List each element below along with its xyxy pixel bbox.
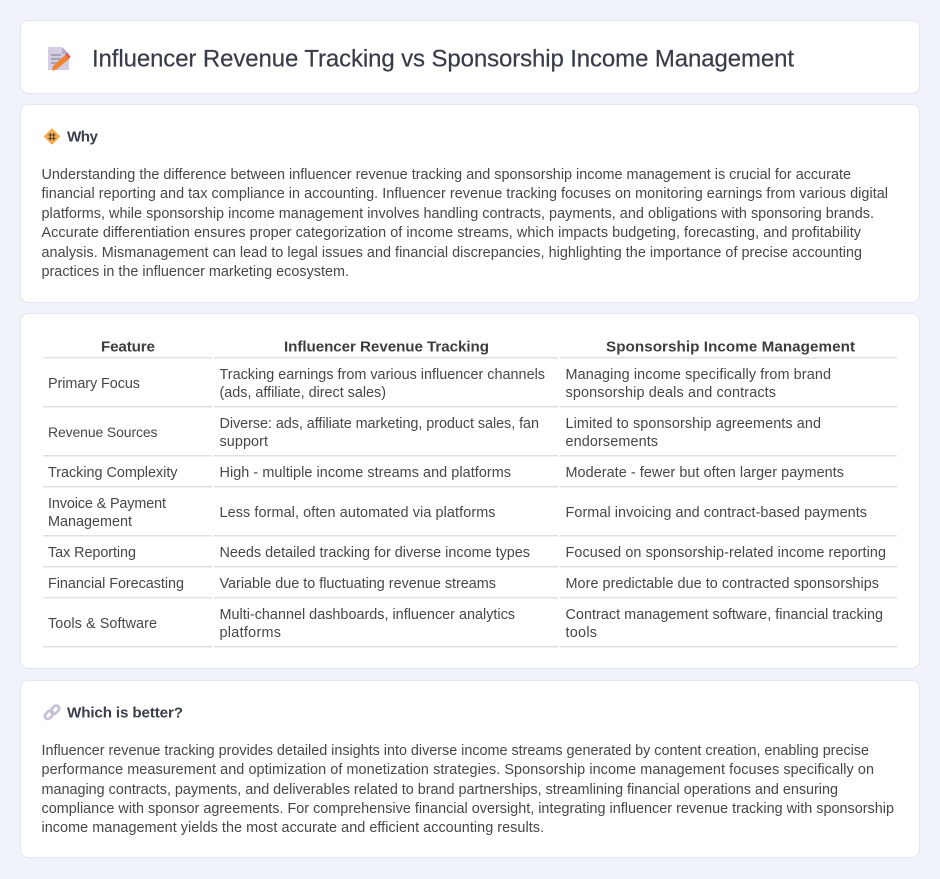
table header row: Sponsorship Income Management [606, 338, 855, 356]
row: financial forecasting: Variable due to fluctuating revenue streams [220, 576, 496, 592]
row: invoice and payment management: Less formal, often automated via platforms [220, 505, 496, 521]
row: primary focus: Tracking earnings from various influencer channels [220, 367, 545, 383]
heading: which is better: Which is better? [67, 704, 183, 722]
row: tracking complexity [43, 465, 897, 488]
row: tracking complexity: Moderate - fewer but often larger payments [566, 465, 844, 481]
text block: which is better paragraph: managing contracts, payments, and deliverables related to brand partnerships, streamlining financial operations and ensuring [42, 782, 838, 798]
row: tools and software: tools [566, 625, 597, 641]
text block: which is better paragraph [42, 743, 894, 836]
panel: why [20, 104, 920, 302]
text block: why paragraph: analysis. Mismanagement can lead to legal issues and financial discrepancies, highlighting the importance of precise accounting [42, 245, 862, 261]
row: primary focus: Managing income specifically from brand [566, 367, 831, 383]
icon: chain link [44, 704, 60, 720]
row: tax reporting: Focused on sponsorship-related income reporting [566, 545, 886, 561]
row: invoice and payment management [43, 496, 897, 536]
text block: why paragraph: practices in the influencer marketing ecosystem. [42, 264, 349, 280]
row: invoice and payment management: Invoice & Payment [48, 496, 166, 512]
title: Influencer Revenue Tracking vs Sponsorship Income Management [92, 46, 794, 72]
row: primary focus: (ads, affiliate, direct sales) [220, 385, 386, 401]
row: invoice and payment management: Management [48, 514, 132, 530]
text block: which is better paragraph: Influencer revenue tracking provides detailed insights into diverse income streams generated by content creation, enabling precise [42, 743, 869, 759]
row: invoice and payment management: Formal invoicing and contract-based payments [566, 505, 867, 521]
table header row: Feature [101, 338, 155, 356]
text block: which is better paragraph: income management yields the most accurate and efficient accounting results. [42, 820, 544, 836]
text block: why paragraph: platforms, while sponsorship income management involves handling contracts, payments, and obligations with sponsoring brands. [42, 206, 874, 222]
icon: document with pencil [48, 47, 70, 71]
text block: which is better paragraph: performance measurement and optimization of monetization strategies. Sponsorship income management focuses specifically on [42, 762, 874, 778]
table header row: Influencer Revenue Tracking [284, 338, 489, 356]
row: primary focus [43, 367, 897, 408]
heading: why: Why [67, 128, 99, 146]
text block: why paragraph [42, 167, 888, 280]
text block: why paragraph: financial reporting and tax compliance in accounting. Influencer revenue tracking focuses on monitoring earnings from various digital [42, 186, 888, 202]
row: tax reporting [43, 545, 897, 568]
row: revenue sources: support [220, 434, 268, 450]
row: revenue sources: endorsements [566, 434, 658, 450]
panel: title header [20, 20, 920, 94]
text block: which is better paragraph: compliance with sponsor agreements. For comprehensive financial oversight, integrating influencer revenue tracking with sponsorship [42, 801, 894, 817]
row: revenue sources [43, 416, 897, 456]
row: revenue sources: Limited to sponsorship agreements and [566, 416, 821, 432]
text block: why paragraph: Understanding the difference between influencer revenue tracking and sponsorship income management is crucial for accurate [42, 167, 851, 183]
row: tools and software: Contract management software, financial tracking [566, 607, 883, 623]
row: financial forecasting: More predictable due to contracted sponsorships [566, 576, 879, 592]
row: tools and software: Multi-channel dashboards, influencer analytics [220, 607, 515, 623]
row: tools and software [43, 607, 897, 648]
row: primary focus: sponsorship deals and contracts [566, 385, 776, 401]
table header row [43, 338, 897, 358]
row: financial forecasting [43, 576, 897, 598]
row: tools and software: platforms [220, 625, 281, 641]
panel: comparison table [20, 314, 920, 668]
row: financial forecasting: Financial Forecasting [48, 576, 184, 592]
panel: which is better [20, 680, 920, 858]
icon: orange diamond [44, 128, 60, 145]
row: tax reporting: Needs detailed tracking for diverse income types [220, 545, 530, 561]
row: tools and software: Tools & Software [48, 616, 157, 632]
row: tracking complexity: High - multiple income streams and platforms [220, 465, 511, 481]
text block: why paragraph: Accurate differentiation ensures proper categorization of income streams, which impacts budgeting, forecasting, and profitability [42, 225, 862, 241]
row: primary focus: Primary Focus [48, 376, 140, 392]
row: tracking complexity: Tracking Complexity [48, 465, 178, 481]
row: tax reporting: Tax Reporting [48, 545, 136, 561]
row: revenue sources: Revenue Sources [48, 424, 158, 440]
row: revenue sources: Diverse: ads, affiliate marketing, product sales, fan [220, 416, 539, 432]
